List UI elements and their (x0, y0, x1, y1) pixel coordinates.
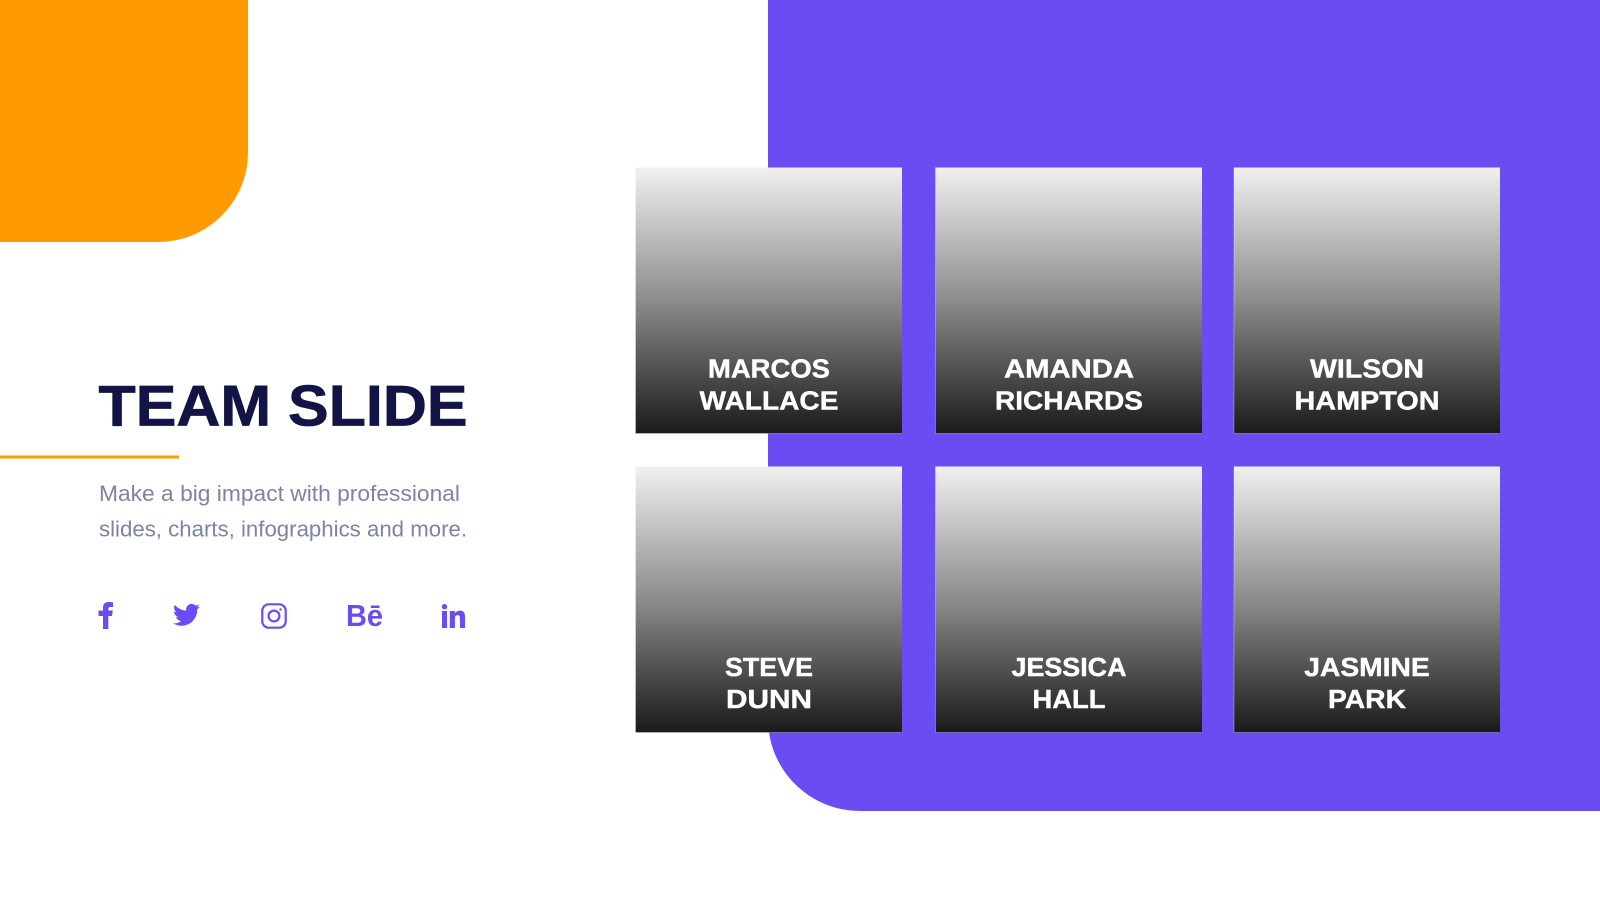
card: Wilson Hampton (1234, 168, 1500, 434)
purple background panel (768, 0, 1600, 811)
orange divider line (0, 456, 179, 458)
card: Jasmine Park: JASMINE (1304, 654, 1430, 682)
card: Wilson Hampton: WILSON (1310, 356, 1424, 384)
icon: behance: Bē (346, 598, 383, 633)
icon: facebook (98, 602, 113, 629)
card: Jessica Hall: HALL (1032, 686, 1106, 714)
description text (99, 481, 467, 542)
card: Steve Dunn: DUNN (726, 686, 812, 714)
card: Steve Dunn (636, 466, 902, 732)
card: Amanda Richards: AMANDA (1004, 356, 1134, 384)
card: Marcos Wallace (636, 168, 902, 434)
card: Amanda Richards (936, 168, 1202, 434)
card: Jasmine Park: PARK (1328, 686, 1407, 714)
card: Wilson Hampton: HAMPTON (1294, 388, 1440, 416)
card: Marcos Wallace: MARCOS (708, 356, 830, 384)
social icons (98, 598, 465, 633)
card: Steve Dunn: STEVE (725, 654, 813, 682)
icon: twitter (173, 604, 200, 626)
card: Marcos Wallace: WALLACE (700, 388, 838, 416)
title: TEAM SLIDE (98, 374, 468, 438)
card: Jasmine Park (1234, 466, 1500, 732)
icon: instagram (262, 604, 286, 628)
card: Jessica Hall: JESSICA (1012, 654, 1126, 682)
description text: slides, charts, infographics and more. (99, 516, 467, 542)
orange corner shape (0, 0, 248, 242)
description text: Make a big impact with professional (99, 481, 460, 506)
icon: linkedin (442, 604, 465, 628)
team grid (636, 168, 1500, 732)
card: Amanda Richards: RICHARDS (995, 388, 1143, 416)
card: Jessica Hall (936, 466, 1202, 732)
